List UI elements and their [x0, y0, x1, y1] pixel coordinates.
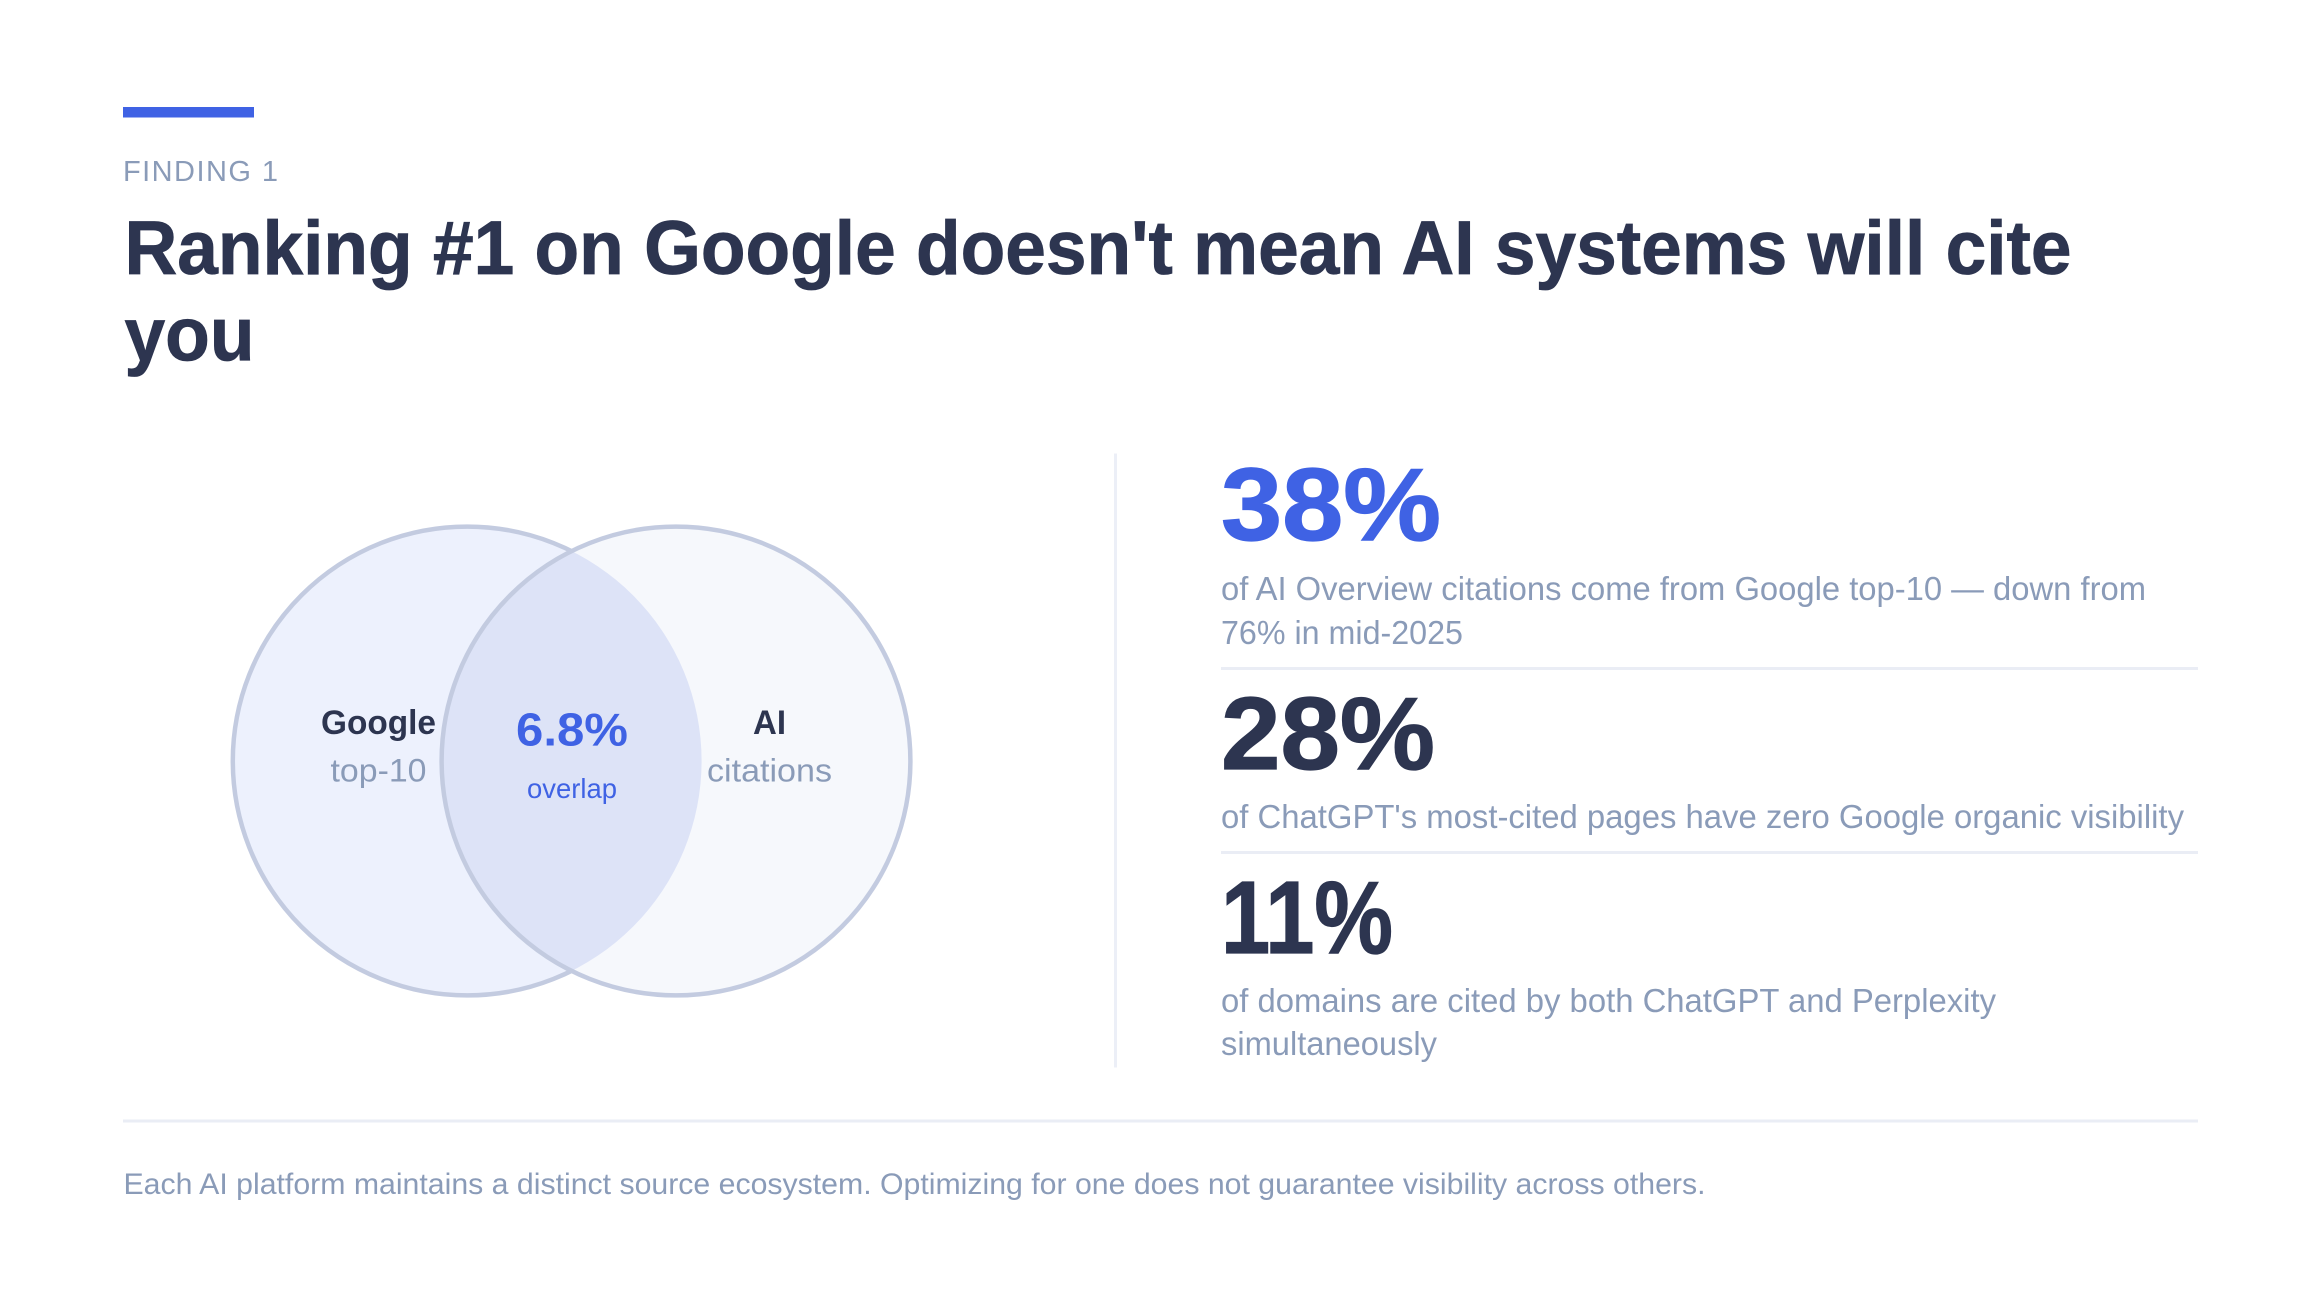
stat: 11%: 11% [1221, 860, 1393, 975]
footer note: Each AI platform maintains a distinct source ecosystem. Optimizing for one does not guarantee visibility across others. [124, 1168, 1706, 1201]
stat: 38%: of AI Overview citations come from Google top-10 — down from [1221, 570, 2146, 607]
infographic canvas [123, 107, 2198, 1200]
circle: AI citations [442, 527, 910, 995]
stat: 38% [1221, 447, 2146, 651]
stat: 28% [1221, 676, 2184, 835]
label: top-10: top-10 [330, 752, 426, 788]
label: AI: AI [753, 704, 786, 742]
stat: 28%: 28% [1221, 676, 1435, 791]
circle: Google top-10 [233, 527, 702, 995]
stat: 38%: 38% [1221, 447, 1441, 562]
venn diagram [233, 527, 910, 995]
overlap lens [444, 552, 702, 970]
stat: 11%: of domains are cited by both ChatGPT and Perplexity [1221, 982, 1996, 1019]
title: you [124, 292, 254, 378]
label: citations: citations [707, 752, 832, 788]
stat: 11% [1221, 860, 1996, 1062]
title: Ranking #1 on Google doesn't mean AI systems will cite [124, 206, 2072, 291]
eyebrow label: FINDING 1 [123, 156, 278, 188]
stat: 11%: simultaneously [1221, 1025, 1437, 1062]
title [124, 206, 2072, 378]
label: overlap: overlap [527, 773, 617, 804]
circle outline: AI citations [442, 527, 910, 995]
label: Google: Google [321, 704, 436, 742]
stat: 28%: of ChatGPT's most-cited pages have zero Google organic visibility [1221, 798, 2184, 835]
label: 6.8%: 6.8% [516, 704, 628, 756]
stat: 38%: 76% in mid-2025 [1221, 614, 1463, 651]
accent bar [123, 107, 254, 118]
